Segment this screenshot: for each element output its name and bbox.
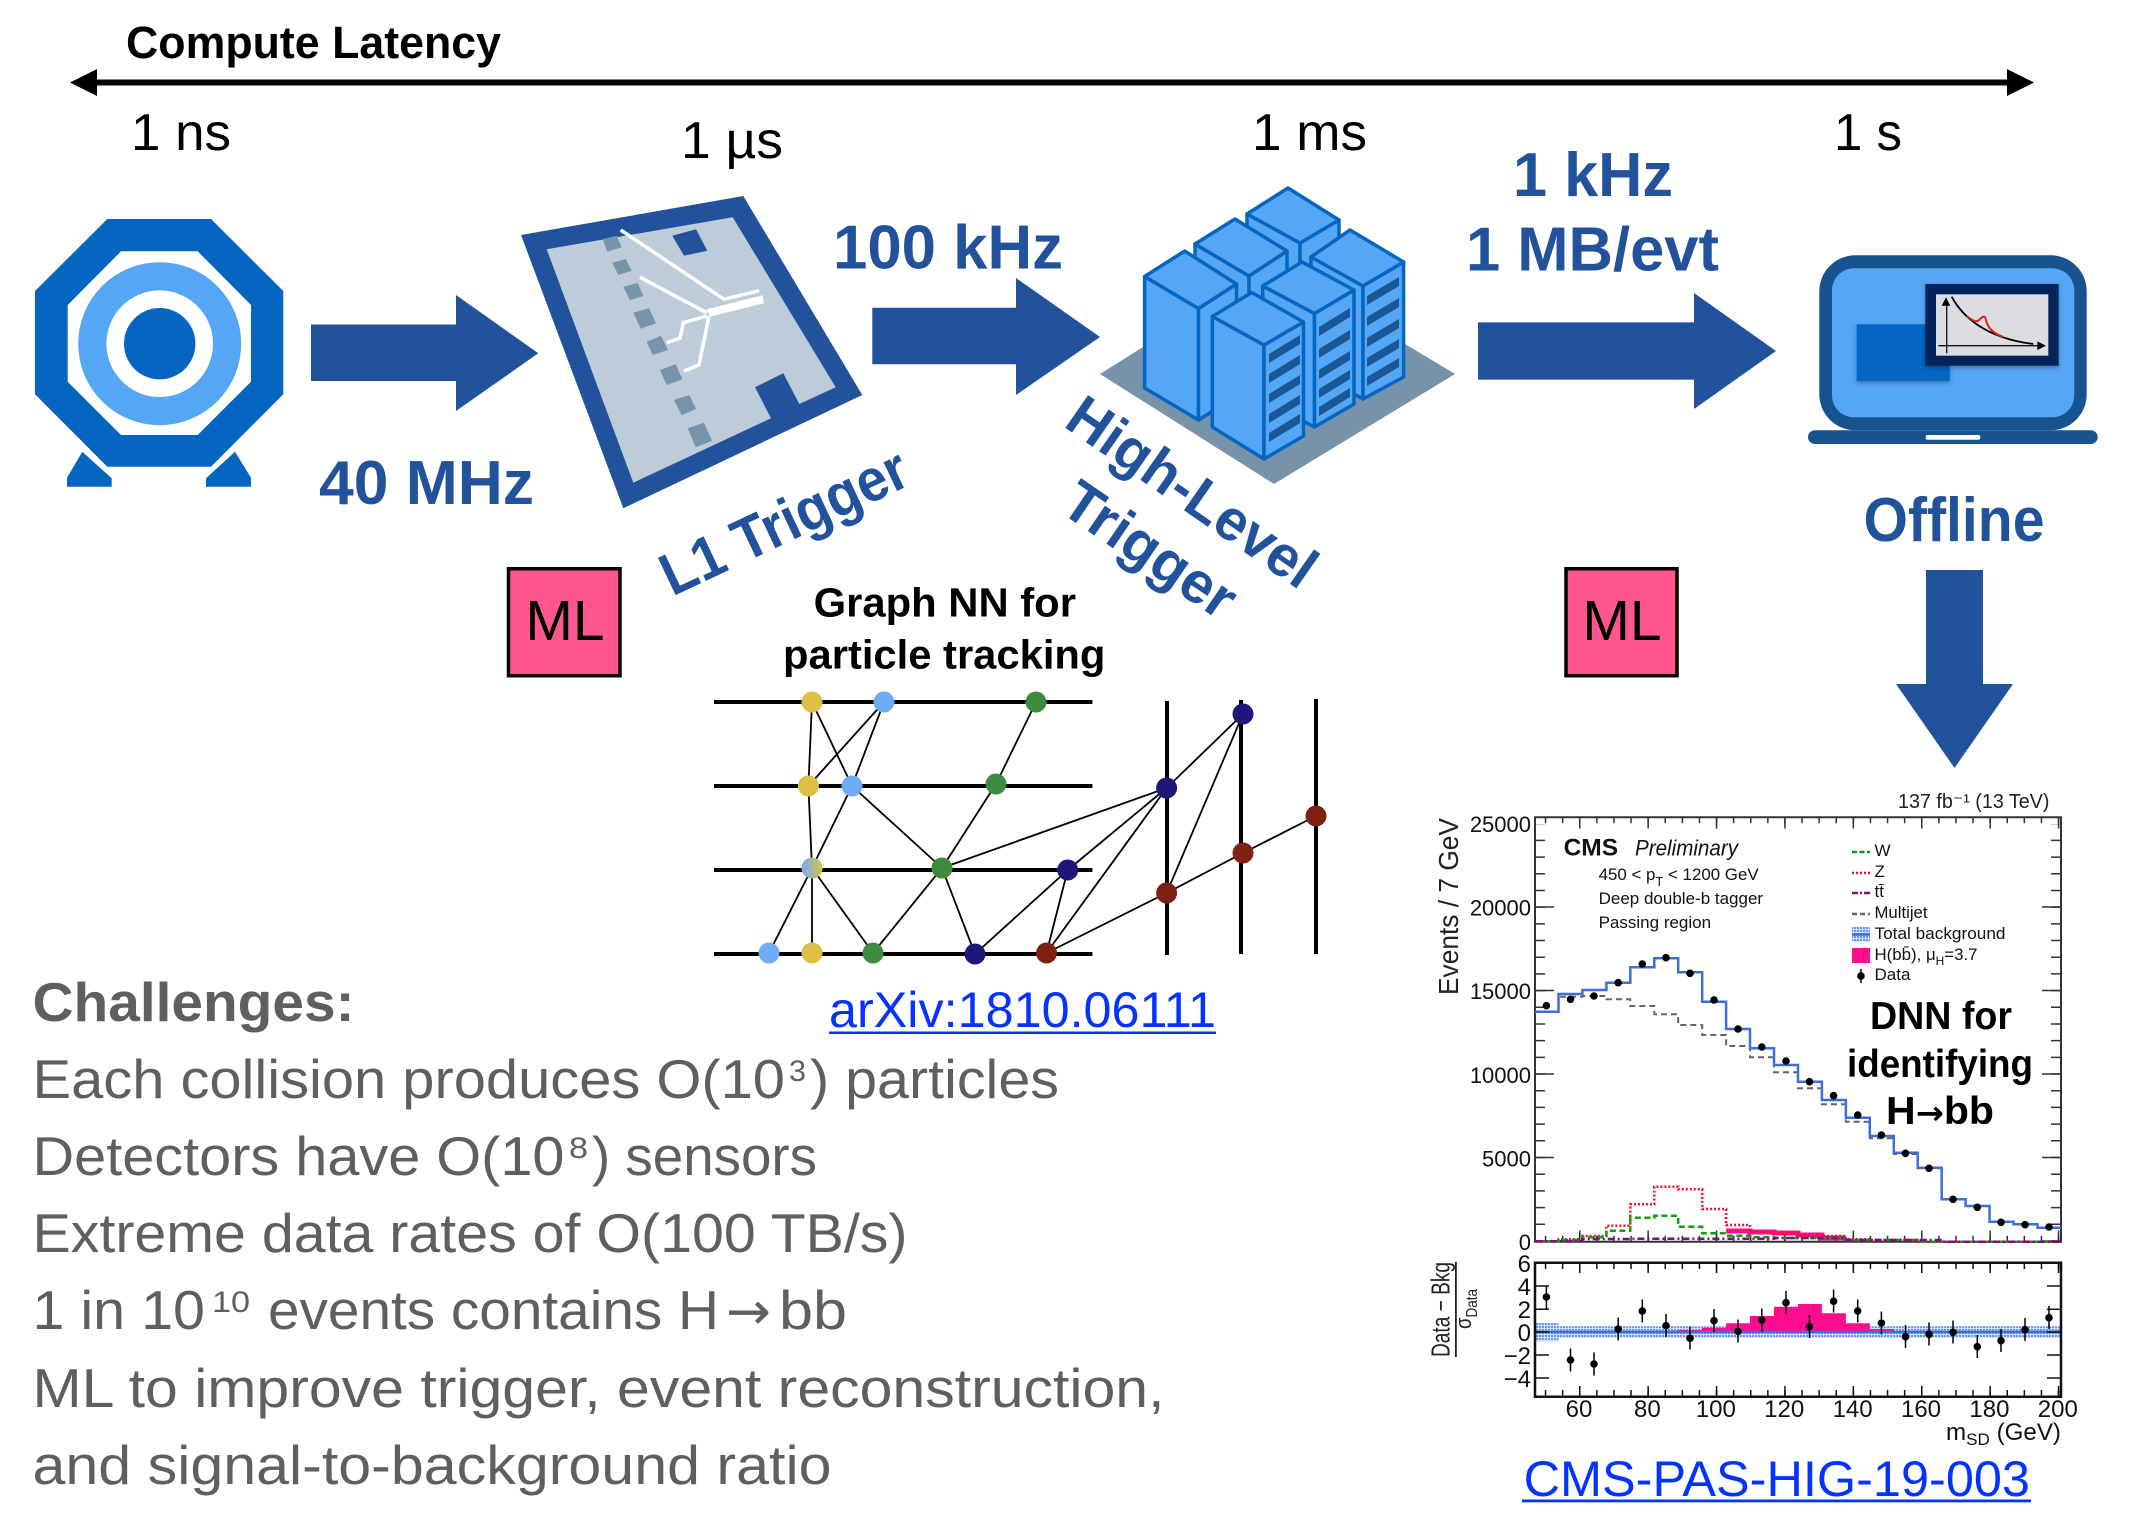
label: 1 s: 1 s xyxy=(1834,104,1902,162)
bullet: H to bb: 10 xyxy=(212,1286,250,1319)
multijet histogram xyxy=(1535,996,1942,1168)
chart: CMS mass spectrum xyxy=(1433,791,2061,1255)
ratio tick labels: 4 xyxy=(1518,1274,1531,1301)
label: Offline: Offline xyxy=(1864,486,2044,555)
annotation: CMS Preliminary: 450 < p xyxy=(1599,865,1656,884)
x tick labels: 180 xyxy=(1969,1396,2009,1423)
legend: Total background xyxy=(1874,924,2006,943)
icon: L1 trigger chip xyxy=(521,196,862,508)
label: L1 Trigger: L1 Trigger xyxy=(649,435,919,608)
arrow: detector to L1 xyxy=(311,295,538,411)
label: 1 ms: 1 ms xyxy=(1252,104,1367,162)
y axis title: Events / 7 GeV xyxy=(1433,818,1464,995)
ratio tick labels: 2 xyxy=(1518,1297,1531,1324)
legend: =3.7 xyxy=(1944,945,1978,964)
chart: graph neural network xyxy=(714,692,1326,964)
x tick labels: 100 xyxy=(1696,1396,1736,1423)
heading: graph NN: particle tracking xyxy=(783,632,1105,678)
bullet: H to bb xyxy=(32,1279,847,1342)
title: Compute Latency: Compute Latency xyxy=(126,17,501,68)
ratio tick labels xyxy=(1504,1251,1531,1393)
bullet: data rates: Extreme data rates of O(100 TB/s) xyxy=(32,1202,908,1264)
label: 1 kHz: 1 kHz xyxy=(1513,141,1673,210)
y axis tick labels: 20000 xyxy=(1470,896,1531,920)
y axis tick labels: 5000 xyxy=(1482,1146,1531,1172)
bullet: particles: 3 xyxy=(789,1055,806,1088)
annotation: DNN for identifying H to bb: DNN for xyxy=(1870,995,2012,1038)
icon: detector xyxy=(35,219,283,487)
bullet: particles: ) particles xyxy=(810,1048,1059,1110)
annotation: CMS Preliminary: Passing region xyxy=(1599,913,1711,932)
link: arXiv: arXiv:1810.06111 xyxy=(829,982,1216,1038)
ratio y title: σ xyxy=(1451,1315,1476,1329)
nodes: hits xyxy=(758,692,1326,964)
label: 1 ns: 1 ns xyxy=(131,104,231,162)
bullet: H to bb: bb xyxy=(779,1279,847,1341)
bullet: H to bb: 1 in 10 xyxy=(32,1279,205,1341)
x tick labels: 60 xyxy=(1566,1396,1592,1423)
Z histogram xyxy=(1535,1187,2061,1242)
label: High-Level: High-Level xyxy=(1055,383,1329,601)
label: Trigger: Trigger xyxy=(1051,468,1249,632)
ratio tick labels: −2 xyxy=(1504,1343,1531,1370)
badge: ML left xyxy=(508,569,620,676)
legend: Multijet xyxy=(1874,903,1928,922)
legend: H(bb̄), μ xyxy=(1874,945,1936,964)
heading: Challenges: Challenges: xyxy=(32,971,354,1033)
label: 1 us: 1 µs xyxy=(681,112,783,170)
x axis title: m xyxy=(1946,1419,1966,1446)
legend: H xyxy=(1936,954,1944,968)
bullet: H to bb: → xyxy=(726,1282,771,1342)
bullet: sensors: 8 xyxy=(569,1132,588,1165)
arrow: HLT to offline xyxy=(1478,293,1776,409)
arrow: latency axis xyxy=(70,69,2034,96)
bullet: sensors: Detectors have O(10 xyxy=(32,1125,564,1187)
label: 40 MHz: 40 MHz xyxy=(319,449,534,518)
bullet: sensors xyxy=(32,1125,817,1187)
link: CMS-PAS-HIG-19-003: CMS-PAS-HIG-19-003 xyxy=(1524,1451,2030,1507)
annotation: DNN for identifying H to bb: identifying xyxy=(1847,1043,2033,1086)
label: 1 MB/evt: 1 MB/evt xyxy=(1466,216,1719,285)
annotation: CMS Preliminary: Preliminary xyxy=(1635,836,1740,860)
chart: ratio panel xyxy=(1426,1251,2078,1449)
x tick labels: 120 xyxy=(1764,1396,1804,1423)
ratio tick labels: −4 xyxy=(1504,1366,1531,1393)
annotation: CMS Preliminary: CMS xyxy=(1564,834,1618,862)
heading: graph NN: Graph NN for xyxy=(814,580,1076,626)
ratio y title xyxy=(1426,1262,1481,1357)
label: 100 kHz: 100 kHz xyxy=(833,214,1063,282)
annotation: CMS Preliminary: Deep double-b tagger xyxy=(1599,889,1763,908)
ratio tick labels: 0 xyxy=(1518,1320,1531,1347)
arrow: L1 to HLT xyxy=(872,278,1100,395)
legend: tt̄ xyxy=(1874,882,1884,901)
bullet: ML goals xyxy=(32,1357,1164,1496)
background band xyxy=(1535,1323,2061,1341)
x tick labels: 80 xyxy=(1634,1396,1661,1423)
ttbar histogram xyxy=(1535,1238,2061,1242)
ratio y title: Data − Bkg xyxy=(1426,1262,1456,1357)
y axis tick labels xyxy=(1470,812,1531,1255)
annotation: CMS Preliminary xyxy=(1564,834,1763,932)
W histogram xyxy=(1535,1216,2061,1242)
bullet: particles: Each collision produces O(10 xyxy=(32,1048,785,1110)
x tick labels: 200 xyxy=(2038,1396,2078,1423)
legend xyxy=(1852,841,2006,984)
y axis tick labels: 10000 xyxy=(1470,1063,1531,1088)
x axis title: (GeV) xyxy=(1990,1419,2061,1446)
bullet: ML goals: ML to improve trigger, event reconstruction, xyxy=(32,1357,1164,1419)
heading: graph NN xyxy=(783,580,1105,678)
total background histogram xyxy=(1535,958,2061,1228)
legend: Data xyxy=(1874,965,1911,984)
bullet: particles xyxy=(32,1048,1059,1110)
ratio points xyxy=(1543,1286,2053,1376)
y axis tick labels: 25000 xyxy=(1470,812,1531,837)
icon: laptop xyxy=(1808,255,2098,444)
signal fill xyxy=(1654,1304,1894,1332)
badge: ML right: ML xyxy=(1582,589,1662,653)
arrow: offline to analysis xyxy=(1896,570,2013,768)
data points xyxy=(1543,954,2053,1231)
legend: W xyxy=(1874,841,1891,860)
badge: ML left: ML xyxy=(525,589,605,653)
annotation: CMS Preliminary: T xyxy=(1655,874,1663,889)
ratio y title: Data xyxy=(1464,1289,1481,1318)
x tick labels: 160 xyxy=(1901,1396,1941,1423)
x tick labels xyxy=(1566,1396,2078,1423)
annotation: DNN for identifying H to bb: H→bb xyxy=(1886,1090,1994,1133)
x axis title: SD xyxy=(1966,1430,1990,1449)
y axis tick labels: 15000 xyxy=(1470,979,1531,1004)
bullet: sensors: ) sensors xyxy=(592,1125,817,1187)
badge: ML right xyxy=(1566,569,1677,676)
bullet: ML goals: and signal-to-background ratio xyxy=(32,1434,832,1496)
signal histogram xyxy=(1726,1231,1846,1238)
text block: challenges xyxy=(32,971,1164,1496)
y axis tick labels: 0 xyxy=(1519,1230,1531,1255)
x tick labels: 140 xyxy=(1833,1396,1873,1423)
icon: server racks xyxy=(1100,188,1455,484)
annotation: CMS Preliminary: < 1200 GeV xyxy=(1663,865,1759,884)
legend: Z xyxy=(1874,862,1885,881)
ratio tick labels: 6 xyxy=(1518,1251,1531,1278)
luminosity label: 137 fb⁻¹ (13 TeV) xyxy=(1898,791,2050,813)
annotation: DNN for identifying H to bb xyxy=(1847,995,2033,1133)
bullet: H to bb: events contains H xyxy=(268,1279,719,1341)
